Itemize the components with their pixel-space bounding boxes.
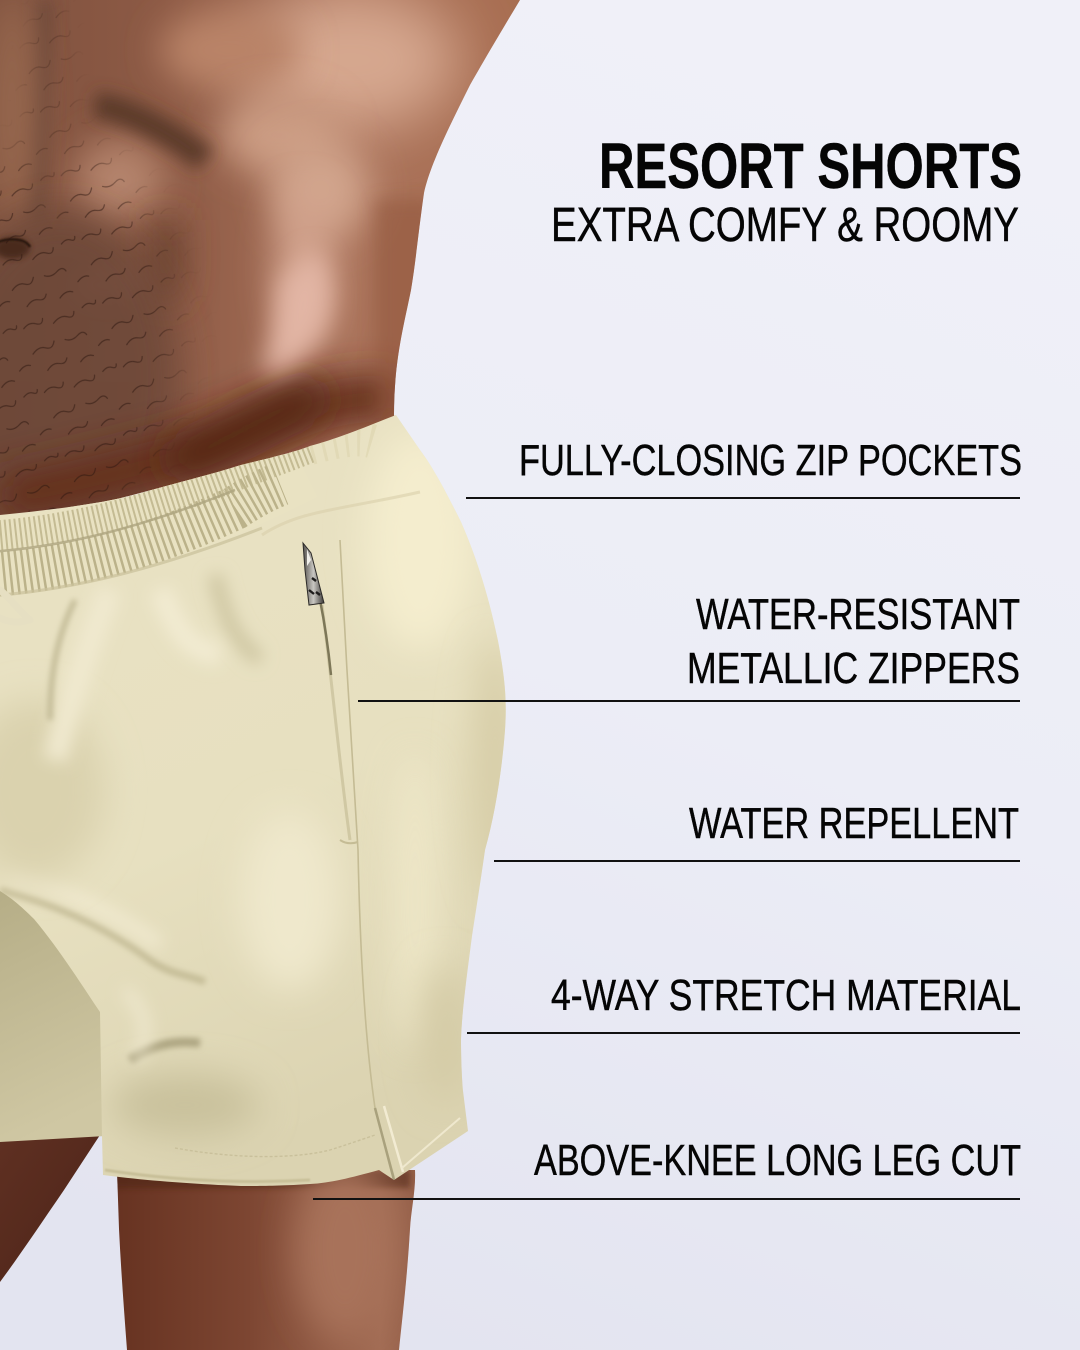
icon: zipper pull bbox=[303, 543, 324, 605]
photo: front thigh bbox=[117, 1170, 416, 1350]
body hair bbox=[0, 10, 192, 512]
icon: navel bbox=[0, 237, 30, 259]
photo: rear thigh bbox=[0, 1135, 100, 1282]
shorts shading bbox=[0, 430, 517, 1137]
photo: shorts bbox=[0, 400, 520, 1200]
photo: model torso bbox=[0, 0, 520, 515]
elastic waistband bbox=[0, 439, 420, 596]
muscle highlight bbox=[260, 250, 331, 375]
photo: far leg of shorts bbox=[0, 885, 106, 1142]
pocket and side seams bbox=[105, 540, 460, 1182]
feature: water-resistant metallic zippers bbox=[358, 590, 1020, 702]
icon: drawstring bbox=[0, 590, 30, 622]
